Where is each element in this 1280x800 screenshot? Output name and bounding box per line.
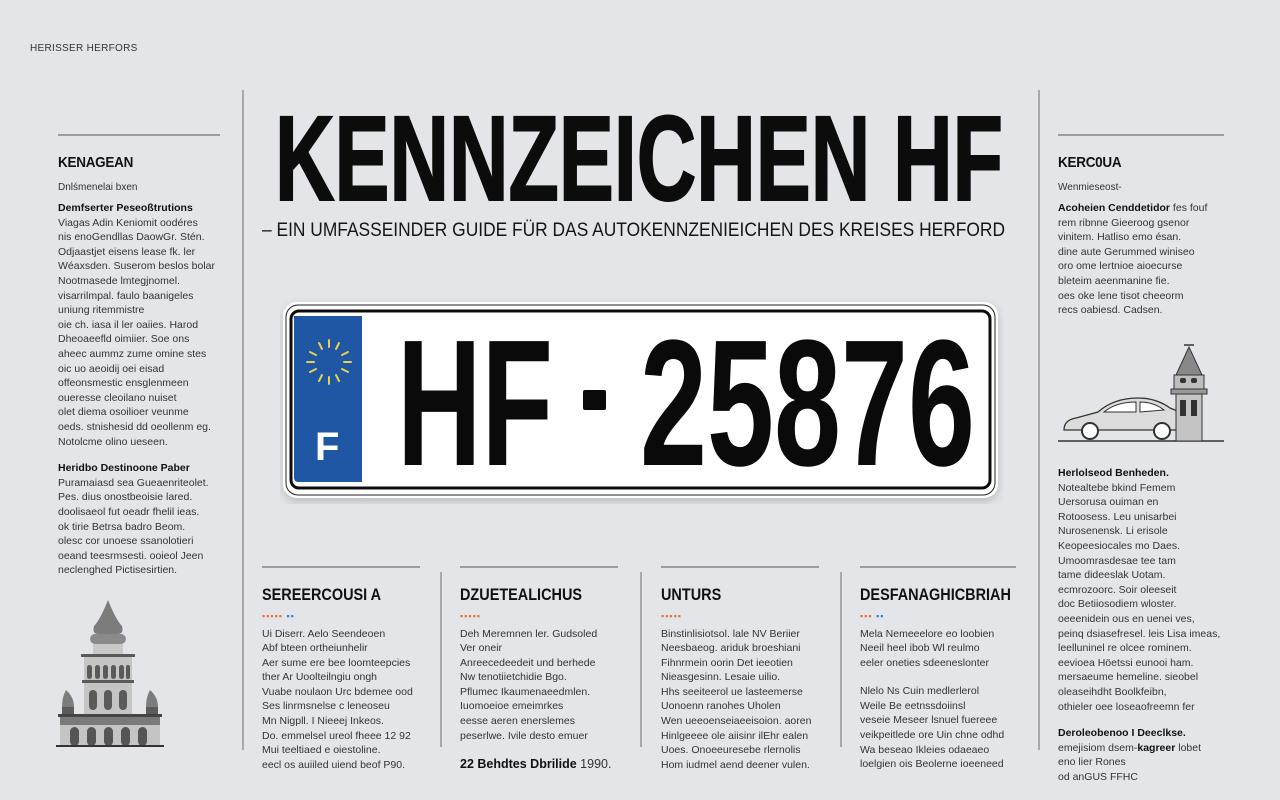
panel: column 2: Anreecedeedeit und berhede	[460, 657, 595, 669]
panel: column 3: Uoes. Onoeeuresebe rlernolis	[661, 744, 800, 756]
panel: left column: olesc cor unoese ssanolotieri	[58, 535, 193, 547]
panel: left column: oie ch. iasa il ler oaiies. Harod	[58, 319, 198, 331]
text block: right lower: Nurosenensk. Li erisole	[1058, 525, 1168, 537]
panel: left column: Odjaastjet eisens lease fk. ler	[58, 246, 195, 258]
text block: right lower: oleaseihdht Boolkfeibn,	[1058, 686, 1167, 698]
panel: left column: olet diema osoilioer veunme	[58, 406, 189, 418]
icon: EU band	[294, 316, 362, 482]
title	[262, 90, 1005, 241]
panel: column 3: Wen ueeoenseiaeeisoion. aoren	[661, 715, 811, 727]
panel: left column: oeand teesrmsesti. ooieol Jeen	[58, 550, 203, 562]
panel: column 3: Hom iudmel aend deener vulen.	[661, 759, 810, 771]
panel: column 2: ▪▪▪▪▪	[460, 610, 481, 620]
panel: left column: Pes. dius onostbeoisie lared.	[58, 491, 192, 503]
license plate: HF	[397, 303, 553, 504]
panel: column 1: SEREERCOUSI A	[262, 584, 381, 604]
panel: left column: ok tirie Betrsa badro Beom.	[58, 521, 185, 533]
icon: building	[56, 600, 164, 747]
panel: left column: Puramaiasd sea Gueaenriteolet.	[58, 477, 209, 489]
panel: column 4: Nlelo Ns Cuin medlerlerol	[860, 685, 979, 697]
panel: column 4: DESFANAGHICBRIAH	[860, 584, 1011, 604]
panel: column 4: veseie Meseer lsnuel fuereee	[860, 714, 997, 726]
panel: left column: Notolcme olino ueseen.	[58, 436, 168, 448]
panel: column 1: Mui teeltiaed e oiestoline.	[262, 744, 380, 756]
panel: column 2: peserlwe. Ivile desto emuer	[460, 730, 588, 742]
panel: left column: oeds. stnishesid dd oeollenm eg.	[58, 421, 211, 433]
panel: right column: Wenmieseost-	[1058, 182, 1122, 192]
panel: column 1: Ses linrmsnelse c leneoseu	[262, 700, 390, 712]
panel: column 2: Ver oneir	[460, 642, 502, 654]
panel: column 1: Abf bteen ortheiunhelir	[262, 642, 368, 654]
text block: right lower: peinq dsiasefresel. leis Lisa imeas,	[1058, 628, 1220, 640]
panel: column 3: Fihnrmein oorin Det ieeotien	[661, 657, 793, 669]
panel: left column: Demfserter Peseoßtrutions	[58, 202, 193, 214]
text block: right lower: leelluninel re olcee rominem.	[1058, 642, 1192, 654]
panel: column 3: Hhs seeiteerol ue lasteemerse	[661, 686, 803, 698]
panel: column 1: ▪▪▪▪▪ ▪▪	[262, 610, 295, 620]
text block: right lower: Herlolseod Benheden.	[1058, 467, 1169, 479]
panel: column 2: Deh Meremnen ler. Gudsoled	[460, 628, 597, 640]
panel: column 1: Do. emmelsel ureol fheee 12 92	[262, 730, 411, 742]
panel: right column	[1058, 134, 1224, 316]
panel: column 4: Mela Nemeeelore eo loobien	[860, 628, 994, 640]
text block: right lower: Rotoosess. Leu unisarbei	[1058, 511, 1176, 523]
panel: column 4: ▪▪▪ ▪▪	[860, 610, 884, 620]
icon: EU band: F	[315, 425, 339, 469]
panel: right column: dine aute Gerummed winiseo	[1058, 246, 1195, 258]
panel: column 4: Neeil heel ibob Wl reulmo	[860, 642, 980, 654]
panel: column 1	[262, 566, 420, 771]
panel: right column: recs oabiesd. Cadsen.	[1058, 304, 1162, 316]
panel: left column: oic uo aeoidij oei eisad	[58, 363, 164, 375]
panel: column 1: Vuabe noulaon Urc bdemee ood	[262, 686, 413, 698]
text block: right lower: mersaeume hemeline. sieobel	[1058, 671, 1198, 683]
panel: left column: offeonsmestic ensglenmeen	[58, 377, 189, 389]
text block: right lower: Uersorusa ouiman en	[1058, 496, 1158, 508]
text block: right lower: Notealtebe bkind Femem	[1058, 482, 1175, 494]
panel: left column: Viagas Adin Keniomit oodéres	[58, 217, 198, 229]
panel: left column: KENAGEAN	[58, 154, 133, 170]
panel: left column: neclenghed Pictisesirtien.	[58, 564, 177, 576]
text block: right lower: doc Betiiosodiem wloster.	[1058, 598, 1176, 610]
text block: right lower: eevioea Höetssi eunooi ham.	[1058, 657, 1193, 669]
panel: column 4	[860, 566, 1016, 770]
panel: column 2: Iuomoeioe emeimrkes	[460, 700, 563, 712]
panel: column 2: DZUETEALICHUS	[460, 584, 582, 604]
panel: column 3: Neesbaeog. ariduk broeshiani	[661, 642, 801, 654]
text block: right lower: eno lier Rones	[1058, 756, 1126, 768]
panel: left column: Dheoaeefld oimiier. Soe ons	[58, 333, 189, 345]
bottom columns	[440, 572, 442, 747]
text block: right lower: Keopeesiocales mo Daes.	[1058, 540, 1180, 552]
text block: right lower: oeeenidein ous en uenei ves,	[1058, 613, 1195, 625]
panel: left column: Dnlśmenelai bxen	[58, 182, 138, 192]
panel: column 4: loelgien ois Beolerne ioeeneed	[860, 758, 1004, 770]
panel: column 3: Binstinlisiotsol. lale NV Beriier	[661, 628, 800, 640]
panel: left column: Heridbo Destinoone Paber	[58, 462, 190, 474]
panel: column 3: Hinlgeeee ole aiisinr ilEhr ealen	[661, 730, 808, 742]
panel: column 1: Mn Nigpll. I Nieeej Inkeos.	[262, 715, 384, 727]
panel: column 2: Pflumec Ikaumenaeedmlen.	[460, 686, 590, 698]
panel: column 4: eeler oneties sdeeneslonter	[860, 657, 989, 669]
panel: column 4: Weile Be eetnssdoiinsl	[860, 700, 965, 712]
panel: left column: doolisaeol fut oeadr fhelil ieas.	[58, 506, 199, 518]
panel: column 3: Nieasgesinn. Lesaie uilio.	[661, 671, 780, 683]
text block: right lower: tame dideeslak Uotam.	[1058, 569, 1165, 581]
panel: column 3	[661, 566, 819, 771]
panel: column 1: ther Ar Uoolteilngiu ongh	[262, 671, 377, 683]
panel: column 3: ▪▪▪▪▪	[661, 610, 682, 620]
panel: column 1: Aer sume ere bee loomteepcies	[262, 657, 410, 669]
panel: column 4: veikpeitlede ore Uin chne odhd	[860, 729, 1004, 741]
panel: column 1: Ui Diserr. Aelo Seendeoen	[262, 628, 385, 640]
panel: right column: oes oke lene tisot cheeorm	[1058, 290, 1184, 302]
top-left label: HERISSER HERFORS	[30, 43, 138, 54]
text block: right lower: ecmrozoorc. Soir oleeseit	[1058, 584, 1176, 596]
panel: column 2: eesse aeren enerslemes	[460, 715, 575, 727]
title: – EIN UMFASSEINDER GUIDE FÜR DAS AUTOKENNZENIEICHEN DES KREISES HERFORD	[262, 220, 1005, 241]
panel: left column: visarrilmpal. faulo baanigeles	[58, 290, 193, 302]
panel: right column: KERC0UA	[1058, 154, 1121, 170]
panel: column 1: eecl os auiiled uiend beof P90.	[262, 759, 405, 771]
panel: column 2	[460, 566, 618, 771]
panel: column 4: Wa beseao Ikleies odaeaeo	[860, 744, 989, 756]
panel: column 2: Nw tenotiietchidie Bgo.	[460, 671, 567, 683]
panel: right column: vinitem. Hatliso emo ésan.	[1058, 231, 1181, 243]
license plate	[280, 302, 1002, 504]
panel: left column: nis enoGendllas DaowGr. Stén.	[58, 231, 204, 243]
text block: right lower: emejisiom dsem-kagreer lobet	[1058, 742, 1201, 754]
text block: right lower: othieler oee loseaofreemn fer	[1058, 700, 1195, 712]
panel: column 3: UNTURS	[661, 584, 721, 604]
panel: left column: Nootmasede lmtegjnomel.	[58, 275, 180, 287]
panel: right column: Acoheien Cenddetidor fes fouf	[1058, 202, 1207, 214]
panel: left column: uniung ritemmistre	[58, 304, 144, 316]
text block: right lower: Deroleobenoo I Deeclkse.	[1058, 727, 1186, 739]
panel: left column: aheec aummz zume omine stes	[58, 348, 206, 360]
panel: left column	[58, 134, 220, 576]
panel: left column: oueresse cleoilano nuiset	[58, 392, 176, 404]
icon: car and tower	[1058, 344, 1224, 442]
text block: right lower: od anGUS FFHC	[1058, 771, 1138, 783]
panel: column 3: Uonoenn ranohes Uholen	[661, 700, 781, 712]
panel: left column: Wéaxsden. Suserom beslos bolar	[58, 260, 215, 272]
text block: right lower: Umoomrasdesae tee tam	[1058, 555, 1176, 567]
panel: right column: bleteim aeenmanine fie.	[1058, 275, 1170, 287]
panel: right column: oro ome lertnioe aioecurse	[1058, 260, 1182, 272]
panel: right column: rem ribnne Gieeroog gsenor	[1058, 217, 1189, 229]
panel: column 2: 22 Behdtes Dbrilide 1990.	[460, 757, 611, 771]
text block: right lower	[1058, 467, 1220, 783]
